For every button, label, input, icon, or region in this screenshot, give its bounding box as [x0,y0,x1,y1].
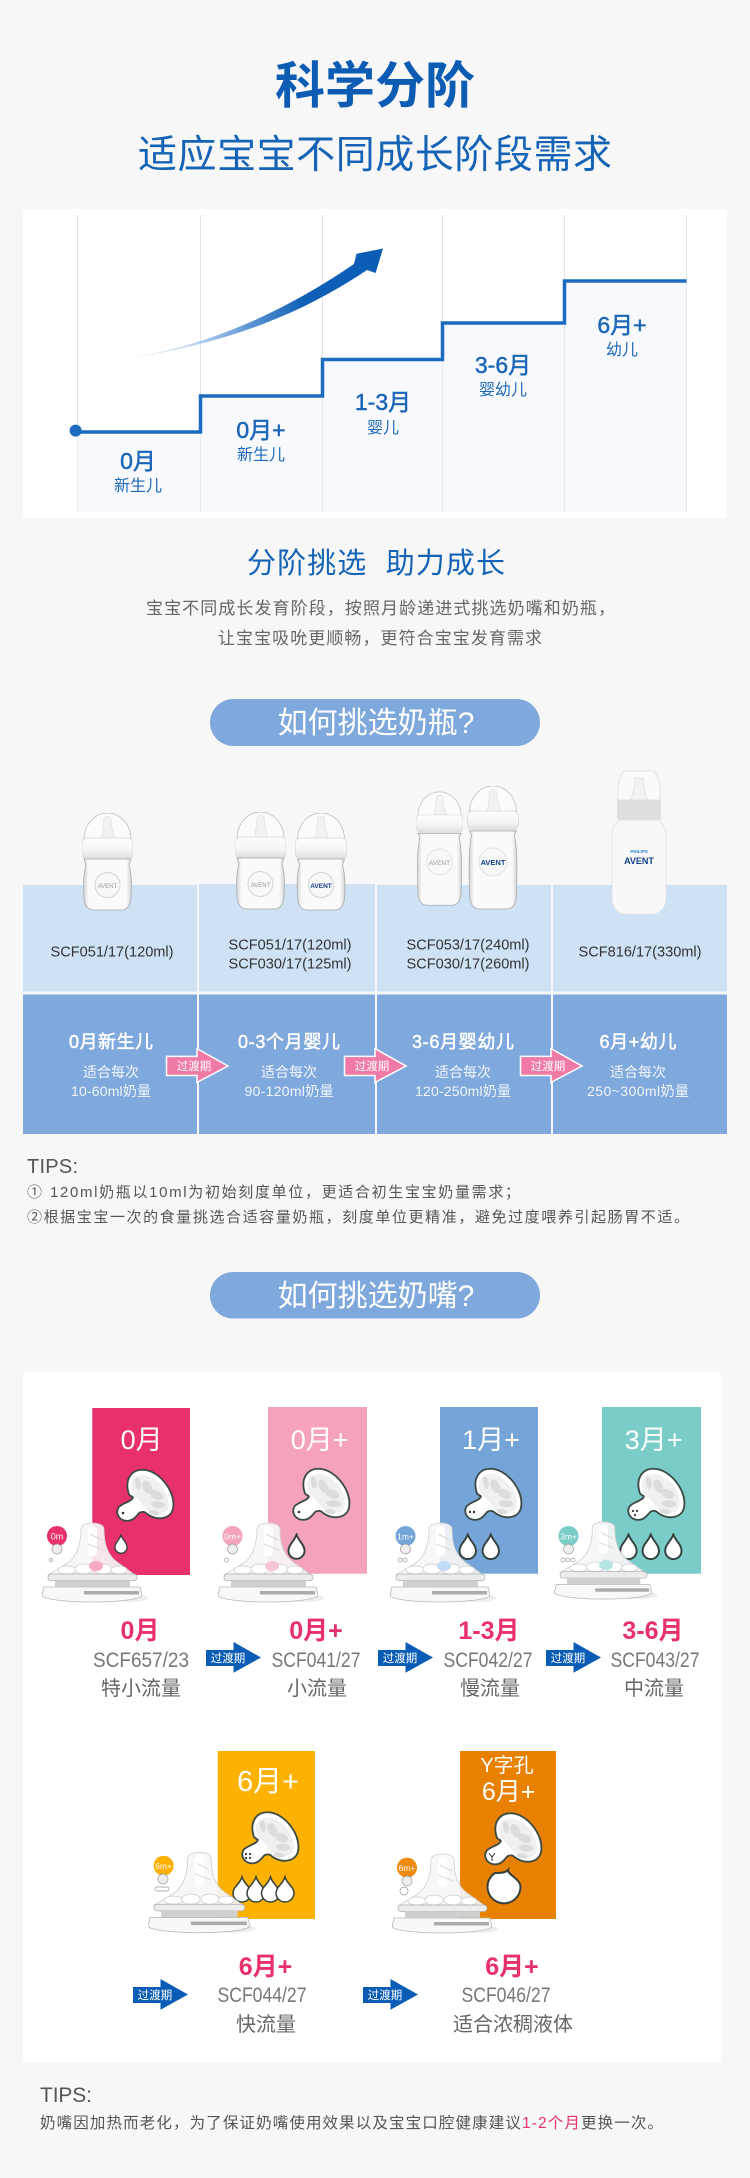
arrow: blue transition 5 [363,1979,418,2010]
labels: row one: 0月 [121,1617,159,1645]
bottle: SCF051 [82,813,133,910]
stage: 0-3个月婴儿 [238,1032,340,1099]
age badge [47,1526,67,1562]
tips: teats: 奶嘴因加热而老化，为了保证奶嘴使用效果以及宝宝口腔健康建议1-2个月更换一次。 [40,2114,663,2132]
labels: row one: 小流量 [287,1677,347,1700]
card: 6月+ Y: Y字孔 [480,1754,534,1777]
labels: row two [218,1953,573,2036]
heading pill: teats: 如何挑选奶嘴? [278,1280,474,1313]
card: 6月+ fast: 6月+ [237,1766,299,1798]
labels: row two: 适合浓稠液体 [453,2013,573,2036]
stage: 3-6月: 婴幼儿 [479,381,527,399]
tips: teats: TIPS: [40,2084,92,2107]
teat petal tint [265,1561,279,1571]
stage: 3-6月: 3-6月 [475,352,531,378]
card: 0月+: 0月+ [291,1425,348,1455]
title: 科学分阶 [275,58,475,114]
stage: 0月+: 0月+ [236,417,286,443]
stage: 0月: 新生儿 [114,477,162,495]
age badge: 6m+ [155,1861,172,1871]
tips: bottles: ① [27,1184,42,1201]
age badge [558,1526,578,1562]
age badge: 0m [51,1532,63,1542]
card: 0月 [42,1408,190,1602]
labels: row two: SCF046/27 [462,1984,550,2007]
age badge: 1m+ [397,1532,414,1542]
bottles: SCF053 and SCF030 [416,786,518,909]
card: 3月+ [554,1407,701,1599]
card: 6月+ Y [392,1751,556,1933]
stage: 0月 [114,448,162,495]
stage: 1-3月: 1-3月 [355,389,411,415]
stage: 6月+ [597,312,647,359]
arrow: transition 1: 过渡期 [177,1059,211,1073]
stage: 6月+: 6月+ [597,312,647,338]
model labels: SCF816/17(330ml) [578,944,702,960]
stage: 3-6月婴幼儿: 3-6月婴幼儿 [412,1032,514,1052]
labels: row one: 3-6月 [622,1617,684,1645]
stage: 1-3月: 婴儿 [367,419,399,437]
stage: 3-6月婴幼儿: 适合每次 [435,1064,491,1080]
teat photo [218,1523,324,1602]
teat petal tint [437,1561,451,1571]
stage: 6月+幼儿: 适合每次 [610,1064,666,1080]
model labels: SCF051/17(120ml) [50,944,174,960]
labels: row one: SCF042/27 [444,1649,532,1672]
heading pill: bottles: 如何挑选奶瓶? [278,707,474,740]
heading pill: teats [210,1272,540,1318]
arrow: blue transition 3 [546,1642,601,1673]
arrow: blue transition 2 [378,1642,433,1673]
labels: row one: 特小流量 [101,1677,181,1700]
stage: 6月+: 幼儿 [606,341,638,359]
card: 3月+: 3月+ [625,1425,682,1455]
stage: 0月新生儿: 10-60ml奶量 [71,1083,151,1099]
bottle: SCF816 [612,771,666,914]
bottles: SCF053 and SCF030: AVENT [429,860,450,867]
stage: 0-3个月婴儿: 0-3个月婴儿 [238,1032,340,1052]
arrow: transition 2 [344,1049,406,1082]
teat petal tint [89,1561,103,1571]
labels: row one: 慢流量 [460,1677,520,1700]
stage: 6月+幼儿: 6月+幼儿 [600,1032,676,1052]
arrow: transition 3 [520,1049,582,1082]
tips: bottles: ②根据宝宝一次的食量挑选合适容量奶瓶，刻度单位更精准，避免过度喂养引起肠胃不适。 [27,1209,689,1226]
card: 6月+ Y: 6月+ [482,1778,535,1806]
arrow: transition 3: 过渡期 [531,1059,565,1073]
labels: row two: 快流量 [236,2013,296,2036]
start dot [70,425,82,437]
stage: 0月新生儿 [69,1032,153,1099]
labels: row one: SCF657/23 [93,1649,189,1672]
bottles: SCF053 and SCF030: AVENT [481,858,506,867]
stage: 0月+ [236,417,286,464]
stage: 3-6月婴幼儿: 120-250ml奶量 [415,1083,511,1099]
teat photo [554,1522,658,1599]
model labels: SCF051/17(120ml) [228,938,352,954]
arrow: blue transition 3: 过渡期 [551,1651,585,1665]
labels: row one: 0月+ [289,1617,343,1645]
panel: bottle table [23,771,727,1134]
model labels: SCF030/17(260ml) [406,956,530,972]
tips: bottles [27,1156,689,1226]
card: 1月+: 1月+ [462,1425,520,1455]
stage: 1-3月 [355,389,411,437]
arrow: blue transition 1: 过渡期 [211,1651,245,1665]
stage: 0月+: 新生儿 [237,446,285,464]
panel: growth stair chart [23,209,727,518]
labels: row two: SCF044/27 [218,1984,306,2007]
stage: 0-3个月婴儿: 90-120ml奶量 [244,1083,334,1099]
teat photo [42,1523,148,1602]
arrow: blue transition 4 [133,1979,188,2010]
text block: intro: 让宝宝吸吮更顺畅，更符合宝宝发育需求 [218,629,542,648]
stage: 3-6月婴幼儿 [412,1032,514,1099]
growth arrow [96,248,383,362]
bottle: SCF816: PHILIPS [630,849,648,854]
age badge: 3m+ [560,1532,577,1542]
model labels: SCF030/17(125ml) [228,956,352,972]
labels: row two: 6月+ [485,1953,539,1981]
labels: row one: SCF041/27 [272,1649,360,1672]
labels: row one: SCF043/27 [610,1649,700,1672]
stage: 0-3个月婴儿: 适合每次 [261,1064,317,1080]
teat petal tint [599,1560,613,1570]
stage: 6月+幼儿: 250~300ml奶量 [587,1083,689,1099]
bottles: SCF051 and SCF030: AVENT [251,883,271,889]
age badge [396,1526,416,1562]
heading pill: bottles [210,699,540,746]
card: 0月+ [218,1407,367,1602]
light model cells [23,884,727,992]
tips: bottles: 120ml奶瓶以10ml为初始刻度单位，更适合初生宝宝奶量需求； [50,1184,520,1201]
panel: teats [23,1372,722,2063]
text block: intro [146,599,615,648]
arrow: transition 1 [166,1049,228,1082]
tips: teats [40,2084,663,2132]
stage: 0月: 0月 [120,448,156,474]
arrow: blue transition 4: 过渡期 [138,1988,172,2002]
age badge: 6m+ [399,1863,415,1873]
tips: bottles: TIPS: [27,1156,78,1178]
bottle: SCF816: AVENT [624,856,654,866]
model labels [50,938,702,972]
arrow: transition 2: 过渡期 [355,1059,389,1073]
card: 6月+ fast [148,1751,315,1933]
stage: 3-6月 [475,352,531,399]
card: 0月: 0月 [121,1425,163,1455]
age badge [397,1858,417,1895]
text block: intro: 宝宝不同成长发育阶段，按照月龄递进式挑选奶嘴和奶瓶， [146,599,615,618]
subtitle: 适应宝宝不同成长阶段需求 [138,134,612,177]
labels: row one: 1-3月 [458,1617,520,1645]
age badge [222,1526,242,1562]
card: 1月+ [390,1407,538,1602]
arrow: blue transition 5: 过渡期 [368,1988,402,2002]
arrow: blue transition 2: 过渡期 [383,1651,417,1665]
arrow: blue transition 1 [206,1642,261,1673]
bottles: SCF051 and SCF030 [235,812,346,910]
dark stage cells [23,994,727,1134]
model labels: SCF053/17(240ml) [406,938,530,954]
stair line [76,281,687,432]
bottles: SCF051 and SCF030: AVENT [310,883,332,890]
labels: row two: 6月+ [239,1953,292,1981]
bottle: SCF051: AVENT [98,884,118,890]
stage: 0月新生儿: 0月新生儿 [69,1032,153,1052]
teat photo [390,1523,496,1602]
teat photo [392,1854,498,1933]
teat photo [148,1852,256,1933]
stage: 0月新生儿: 适合每次 [83,1064,139,1080]
stage: 6月+幼儿 [587,1032,689,1099]
labels: row one: 中流量 [624,1677,684,1700]
labels: row one [93,1617,700,1700]
age badge: 0m+ [224,1532,241,1542]
age badge [154,1856,174,1891]
heading: 分阶挑选 助力成长: 分阶挑选 助力成长 [247,547,505,580]
